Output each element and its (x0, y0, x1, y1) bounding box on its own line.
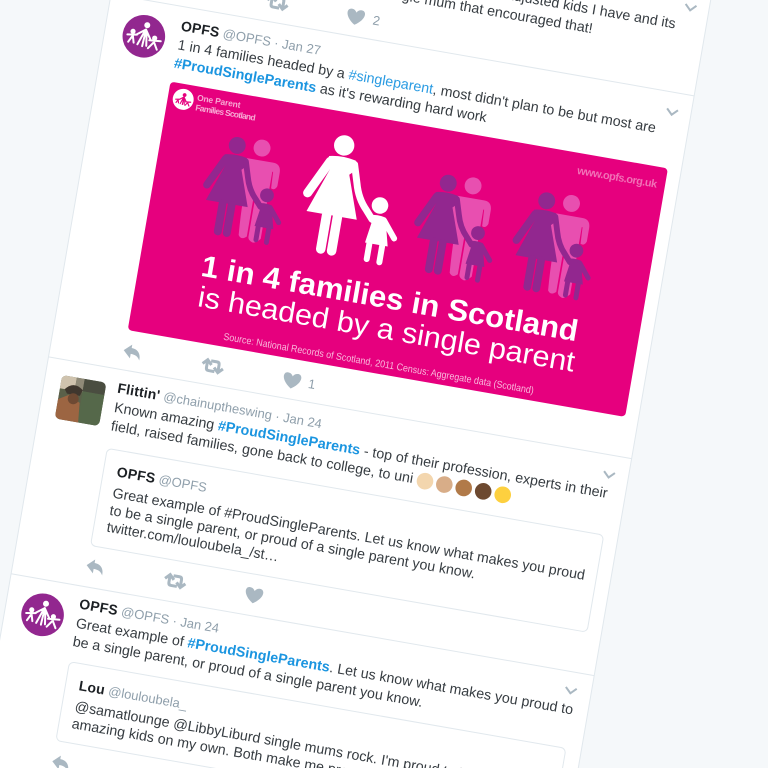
tweet: OPFS Jan 24: be a single parent, or proud of a single parent you know. (72, 634, 424, 711)
previous tweet fragment (266, 0, 696, 82)
previous tweet fragment: 2 (372, 13, 381, 29)
figures: two-parent family 1 (199, 131, 292, 246)
OPFS image logo: One Parent (196, 92, 242, 110)
avatar: OPFS logo (18, 590, 67, 639)
tweet body: 1 in 4 families headed by a #singleparent, most didn't plan to be but most are (176, 37, 657, 137)
tweet: Flittin' Jan 24: field, raised families, gone back to college, to uni (110, 418, 414, 487)
tweet actions (85, 558, 264, 605)
tweet header: Flittin' @chainuptheswing · Jan 24 (116, 380, 323, 431)
chevron (666, 108, 678, 116)
quoted tweet card (56, 662, 566, 768)
tweet body: Known amazing #ProudSingleParents - top of their profession, experts in their (113, 400, 609, 502)
source note: Source: National Records of Scotland, 2011 Census: Aggregate data (Scotland) (222, 332, 535, 397)
image subheadline: is headed by a single parent (196, 281, 577, 379)
tweet body: Great example of #ProudSingleParents. Let us know what makes you proud to (75, 616, 574, 718)
tweet header: OPFS @OPFS · Jan 24 (78, 596, 220, 636)
image headline: 1 in 4 families in Scotland (199, 250, 581, 348)
tweet: OPFS Jan 24 (0, 586, 578, 768)
figures: single parent family highlighted (298, 131, 410, 264)
figures: two-parent family 3 (508, 187, 602, 302)
pink image: 1 in 4 families (128, 82, 668, 417)
tweet actions (122, 343, 317, 393)
quoted tweet card (91, 448, 604, 632)
tweet header: OPFS @OPFS · Jan 27 (180, 18, 322, 58)
emoji fists (415, 472, 512, 504)
reply icon (51, 754, 70, 768)
quoted header: OPFS @OPFS (116, 464, 208, 495)
chevron (603, 471, 615, 478)
quoted text: Great example of #ProudSingleParents. Let us know what makes you proud (111, 486, 586, 584)
tweet: OPFS Jan 27: #ProudSingleParents as it's rewarding hard work (173, 56, 489, 126)
quoted header: Lou @louloubela_ (78, 677, 189, 712)
quoted tweet card: to be a single parent, or proud of a single parent you know. (108, 503, 476, 582)
quoted tweet card: twitter.com/louloubela_/st… (105, 520, 280, 565)
figures: two-parent family 2 (410, 169, 503, 284)
avatar: OPFS logo (119, 12, 168, 61)
tweet: OPFS Jan 27 (68, 8, 679, 446)
OPFS image logo (171, 87, 258, 123)
website: www.opfs.org.uk (575, 165, 659, 191)
OPFS image logo: Families Scotland (195, 102, 256, 123)
chevron (565, 687, 577, 694)
tweet actions: 1 (307, 376, 317, 392)
avatar: photo of person (54, 374, 108, 428)
tweet: Flittin' Jan 24 (55, 376, 616, 632)
